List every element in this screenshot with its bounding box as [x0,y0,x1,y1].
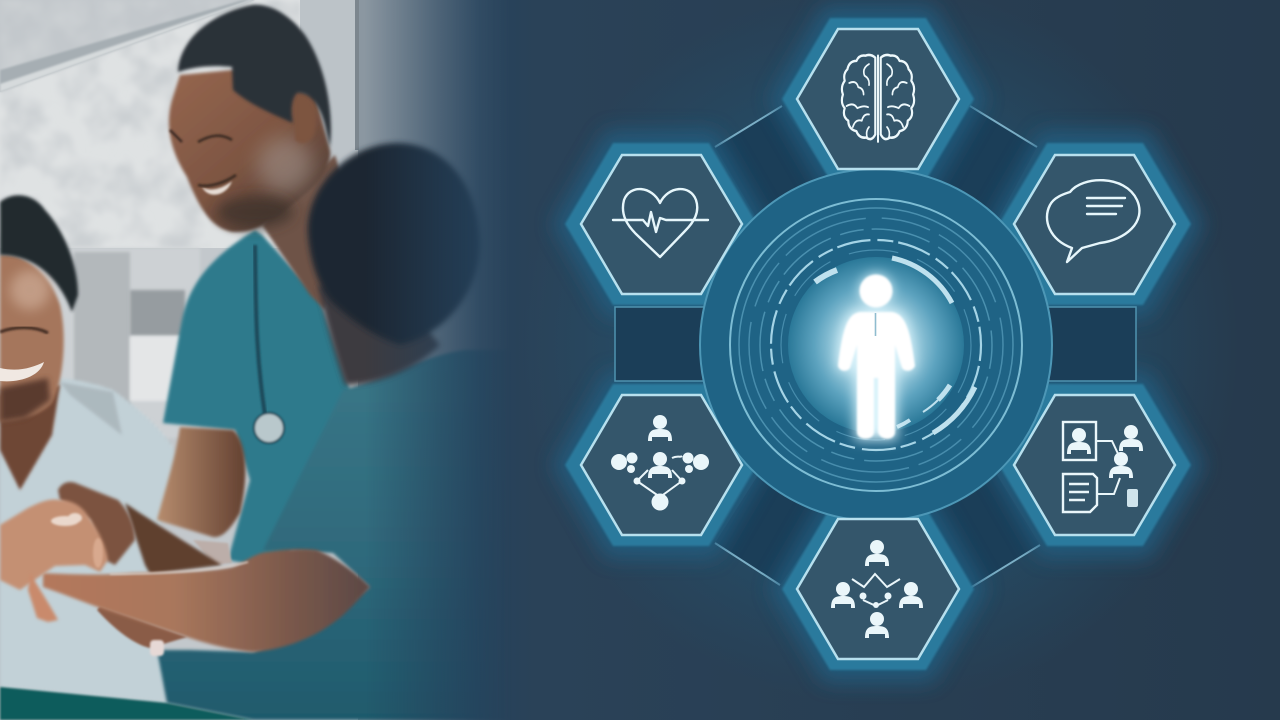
central disc [700,169,1052,521]
radial hub network [518,0,1238,705]
foliage texture [0,0,300,248]
hexagon halo: upper left [553,131,769,317]
icon: care team network [831,540,923,638]
female nurse face [318,285,440,385]
concentric rings [700,169,1052,521]
arm highlight [110,562,248,574]
patient neck [0,385,60,490]
cell right [1047,307,1136,381]
gown collar [60,382,122,435]
person head [860,274,892,308]
fingertip [68,513,82,523]
male nurse scrubs [163,230,360,570]
hexagon: care circle [581,395,742,535]
patient gown [0,378,177,703]
cell upper right [925,106,1037,217]
fingers [51,513,103,568]
photo: nurses and patient [0,0,530,720]
icon: patient records flow [1063,422,1143,512]
hexagon halo: lower left [553,372,769,558]
male nurse smile [202,181,232,195]
bed rail [0,687,253,720]
finger tip lower [93,538,103,568]
wall [358,0,490,720]
male nurse head [169,70,330,232]
dark forearm [125,503,222,574]
cell lower left [715,475,830,585]
wrist band [150,640,164,656]
cell upper left [715,106,830,217]
male nurse neck [262,154,340,310]
bright car [130,336,180,401]
female nurse scrubs [156,350,491,720]
patient eye [0,328,48,333]
hexagon halo: top [770,6,986,192]
icon: heart with pulse [613,189,708,257]
hexagon halo: lower right [987,372,1203,558]
stethoscope chest piece [254,413,284,443]
wall edge [355,0,359,150]
hexagon: records [1014,395,1175,535]
hexagon halo: bottom [770,496,986,682]
female nurse hair [308,143,480,345]
cell left [615,307,705,381]
stethoscope [255,245,265,415]
thumb [28,573,58,622]
bright ring segments [815,258,975,433]
female nurse arm [43,549,370,652]
male nurse moustache [198,175,236,186]
light hand [0,499,108,590]
icon: people network [611,415,709,510]
building pillar [73,251,131,402]
sky beside head [300,0,355,160]
blurred foliage [0,0,300,248]
hexagon: speech bubble [1014,155,1175,294]
core glow [788,257,964,433]
distant building [53,250,198,436]
patient hair [0,195,78,312]
male forearm lower [97,606,187,648]
male nurse arm [157,427,245,537]
person tie [874,313,876,336]
central person [838,274,915,439]
strip behind arm [193,540,232,565]
chin shadow [217,196,293,228]
icon: brain [842,55,914,142]
cell lower right [925,475,1040,588]
hexagon halo: upper right [987,131,1203,317]
cheek highlight [257,137,313,193]
male nurse hair [178,5,331,147]
connector cells [715,106,1040,588]
knuckle [51,516,79,526]
hexagon: heart [581,155,742,294]
male nurse ear [295,122,314,143]
window background [0,0,362,720]
person body [838,312,915,439]
central person glow [837,274,915,440]
dark hand [58,482,135,565]
patient smile [0,362,44,381]
patient chin [0,378,50,422]
building pane [130,290,185,336]
window frame [0,0,255,92]
ambient glow [518,0,1238,705]
hexagon: team [797,519,959,659]
icon: speech bubble [1047,180,1139,262]
patient face [0,255,64,422]
hexagon: brain [797,29,959,169]
male nurse brow [170,130,232,142]
frame highlight [0,0,255,92]
patient forehead highlight [10,270,50,310]
connector lines [715,106,1040,588]
